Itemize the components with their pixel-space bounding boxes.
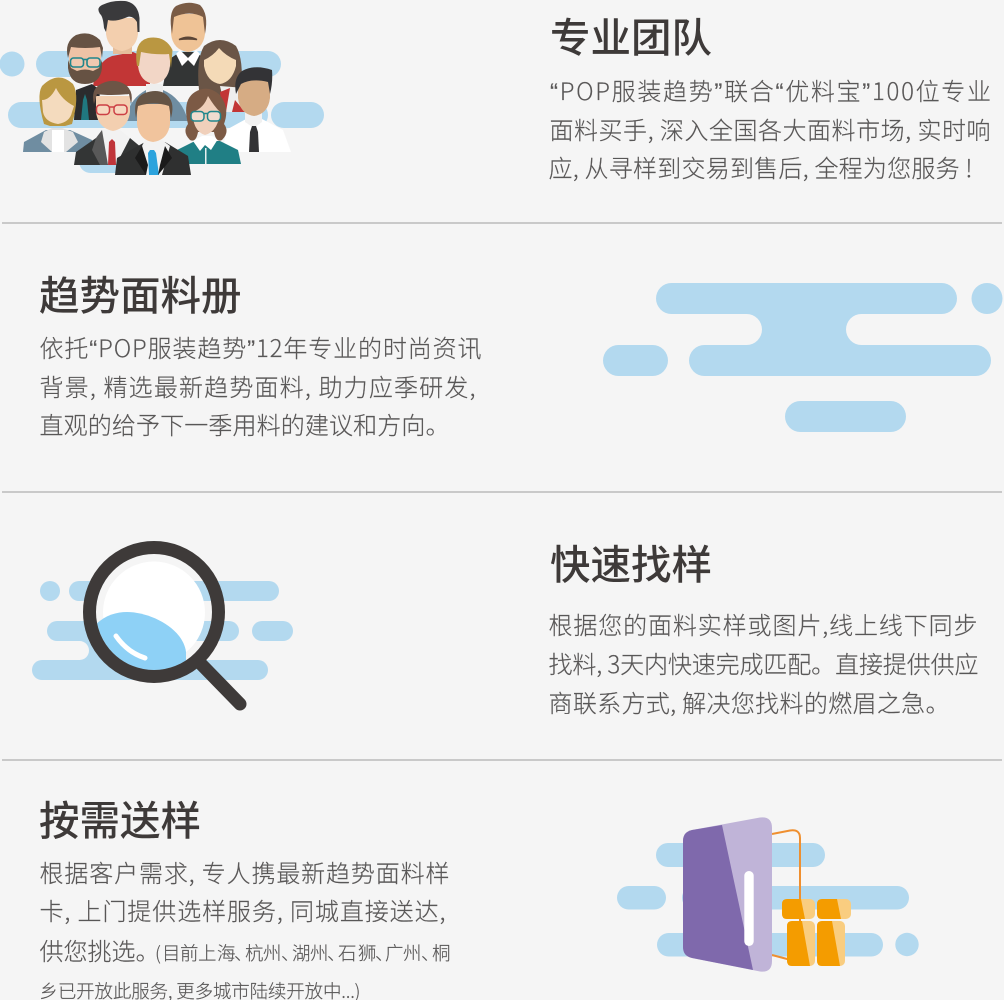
person: dark-skinned man, white shirt [223,67,291,152]
magnifier handle [202,665,240,704]
heading: 快速找样: 快速找样 [550,532,712,591]
book cover [683,817,772,972]
person: front man, blue tie [115,91,191,175]
heading: 专业团队: 专业团队 [550,5,712,64]
illustration: magnifying glass [20,548,293,704]
person: red glasses, dark suit [74,81,145,165]
text block: team description: 应, 从寻样到交易到售后, 全程为您服务 ! [548,149,972,184]
person: blond woman, grey jacket [23,77,94,152]
person: black hair, red shirt [93,1,150,86]
heading: 趋势面料册: 趋势面料册 [39,263,242,322]
person: woman with glasses, teal top [175,89,241,164]
text block: sample search description [548,606,978,719]
person: woman with dark hair [198,40,245,112]
text block: delivery description: 卡, 上门提供选样服务, 同城直接送达, [40,892,446,927]
heading: 按需送样: 按需送样 [39,788,201,847]
text block: delivery description: 供您挑选。 [40,932,160,967]
magnifier ring [90,548,218,676]
person: beard and teal glasses [67,33,103,120]
text block: team description: “POP服装趋势”联合“优料宝”100位专业 [550,72,991,107]
text block: delivery description: (目前上海、杭州、湖州、石狮、广州、桐 [155,940,451,966]
text block: sample search description: 找料, 3天内快速完成匹配。直接提供供应 [548,645,978,680]
background clouds [617,843,919,956]
background clouds [0,51,324,173]
lens [96,562,211,670]
illustration: swatch book and gift boxes [617,817,919,972]
text block: team description [548,72,991,184]
text block: trend book description: 背景, 精选最新趋势面料, 助力应季研发, [40,368,476,403]
person: blond man, grey suit [126,38,188,121]
illustration: team of people [0,1,324,175]
text block: trend book description: 直观的给予下一季用料的建议和方向。 [40,406,450,441]
person: moustache, dark vest [163,3,208,86]
illustration: clouds [603,283,1002,432]
orange boxes [782,899,851,966]
text block: delivery description [40,854,451,1000]
text block: trend book description: 依托“POP服装趋势”12年专业的时尚资讯 [40,329,482,364]
text block: sample search description: 商联系方式, 解决您找料的燃眉之急。 [548,684,950,719]
text block: team description: 面料买手, 深入全国各大面料市场, 实时响 [550,111,990,146]
background clouds [20,581,293,680]
text block: trend book description [40,329,482,441]
text block: sample search description: 根据您的面料实样或图片,线上线下同步 [548,606,978,641]
orange frame [772,830,800,960]
text block: delivery description: 根据客户需求, 专人携最新趋势面料样 [40,854,450,889]
